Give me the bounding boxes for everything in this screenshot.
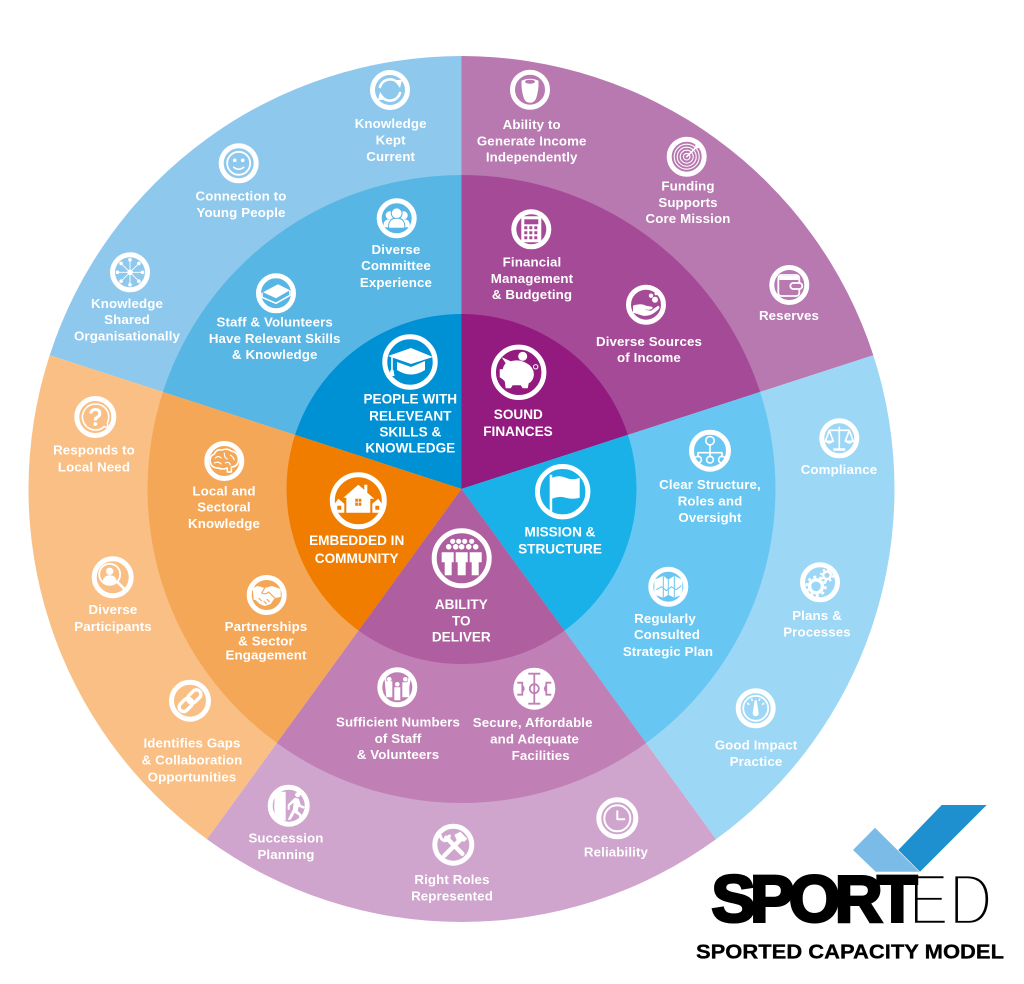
logo: Sported wordmark and check mark xyxy=(712,805,992,940)
band: inner finance core xyxy=(462,314,628,489)
icon: graduation cap xyxy=(385,337,435,387)
caption: Sported capacity model: SPORTED CAPACITY MODEL xyxy=(696,942,1004,964)
icon: committee group xyxy=(379,201,414,236)
heading: embedded in community: EMBEDDED IN xyxy=(309,533,404,548)
label: clear structure roles and oversight: Roles and xyxy=(678,494,742,509)
label: connection to young people: Connection to xyxy=(196,189,286,204)
heading: ability to deliver: DELIVER xyxy=(432,630,491,645)
heading: ability to deliver: ABILITY xyxy=(435,597,488,612)
icon: wallet xyxy=(772,268,807,302)
label: good impact practice: Good Impact xyxy=(715,737,798,752)
label: funding supports core mission: Core Mission xyxy=(646,211,730,226)
band: outer people ring xyxy=(50,56,461,489)
label: succession planning: Planning xyxy=(257,847,315,862)
label: local and sectoral knowledge: Knowledge xyxy=(188,516,260,531)
icon: smiling face xyxy=(221,146,256,181)
icon: handshake xyxy=(249,578,284,612)
label: local and sectoral knowledge: Local and xyxy=(192,484,256,499)
icon: circular arrows xyxy=(372,72,408,108)
heading: people with relevant skills: PEOPLE WITH xyxy=(363,391,457,406)
band: middle community ring xyxy=(148,392,462,743)
icon: person leaving door xyxy=(270,787,307,824)
icon: hand with coins xyxy=(628,287,664,322)
label: knowledge kept current: Kept xyxy=(376,132,406,148)
panel: sound finances xyxy=(462,56,873,489)
icon: question bubble xyxy=(77,398,114,436)
icon: crossed hammer and wrench xyxy=(435,826,472,863)
icon: brain xyxy=(207,444,242,478)
label: reliability: Reliability xyxy=(584,845,649,860)
label: sufficient numbers of staff and volunteers: Sufficient Numbers xyxy=(336,715,460,730)
label: diverse committee experience: Experience xyxy=(360,275,432,290)
heading: people with relevant skills: KNOWLEDGE xyxy=(365,441,455,456)
band: inner community core xyxy=(287,435,462,631)
panel: embedded in community xyxy=(29,355,461,839)
label: diverse committee experience: Diverse xyxy=(372,242,420,257)
label: partnerships and sector engagement: Partnerships xyxy=(225,619,307,634)
label: knowledge shared organisationally: Knowledge xyxy=(91,296,163,311)
icon: staff raising hands xyxy=(380,670,415,705)
label: regularly consulted strategic plan: Regularly xyxy=(634,611,696,626)
band: middle mission ring xyxy=(462,392,775,743)
panel: ability to deliver xyxy=(207,489,716,922)
panel: mission and structure xyxy=(462,355,894,839)
label: secure affordable adequate facilities: Facilities xyxy=(512,748,570,763)
label: diverse sources of income: Diverse Sources xyxy=(596,334,702,349)
icon: tumbler xyxy=(512,71,548,107)
heading: embedded in community: COMMUNITY xyxy=(315,551,399,566)
icon: calculator xyxy=(514,212,549,247)
label: reserves: Reserves xyxy=(759,308,819,323)
label: identifies gaps and collaboration opportunities: & Collaboration xyxy=(142,752,242,768)
heading: people with relevant skills: RELEVEANT xyxy=(369,408,452,423)
icon: houses xyxy=(332,475,384,527)
label: secure affordable adequate facilities: Secure, Affordable xyxy=(473,715,593,730)
label: diverse committee experience: Committee xyxy=(361,258,431,273)
label: regularly consulted strategic plan: Strategic Plan xyxy=(623,644,713,659)
icon: flag xyxy=(538,466,588,517)
label: ability to generate income: Generate Income xyxy=(477,134,587,148)
band: inner mission core xyxy=(462,435,636,631)
icon: gears xyxy=(802,565,838,600)
heading: ability to deliver: TO xyxy=(452,614,471,629)
label: funding supports core mission: Funding xyxy=(661,179,715,194)
label: partnerships and sector engagement: & Sector xyxy=(238,634,294,649)
band: outer mission ring xyxy=(462,355,894,839)
band: outer finance ring xyxy=(462,56,873,489)
label: diverse sources of income: of Income xyxy=(617,350,681,365)
label: plans and processes: Plans & xyxy=(792,608,842,623)
label: knowledge shared organisationally: Shared xyxy=(104,312,150,327)
label: good impact practice: Practice xyxy=(730,754,782,769)
label: clear structure roles and oversight: Oversight xyxy=(678,510,742,525)
label: funding supports core mission: Supports xyxy=(658,195,718,210)
icon: organisation chart xyxy=(692,432,728,469)
icon: folded map xyxy=(651,569,686,604)
label: ability to generate income: Independently xyxy=(486,150,578,165)
label: plans and processes: Processes xyxy=(783,625,851,640)
label: regularly consulted strategic plan: Consulted xyxy=(634,627,700,642)
label: financial management and budgeting: & Budgeting xyxy=(492,287,572,302)
label: local and sectoral knowledge: Sectoral xyxy=(197,500,251,515)
label: staff and volunteers skills: Have Relevant Skills xyxy=(209,331,341,346)
icon: check mark xyxy=(853,805,987,872)
band: middle finance ring xyxy=(462,175,760,489)
wordmark: thin ED: ED xyxy=(908,860,992,940)
icon: chain link xyxy=(172,682,208,719)
heading: people with relevant skills: SKILLS & xyxy=(379,425,441,440)
label: identifies gaps and collaboration opportunities: Opportunities xyxy=(148,770,236,784)
label: diverse participants: Participants xyxy=(74,619,152,634)
band: outer community ring xyxy=(29,355,461,839)
icon: person under magnifier xyxy=(94,559,131,596)
band: outer delivery ring xyxy=(207,489,716,922)
label: succession planning: Succession xyxy=(248,831,324,846)
label: knowledge kept current: Current xyxy=(366,149,416,164)
label: financial management and budgeting: Management xyxy=(491,271,574,286)
icon: knowledge network xyxy=(112,255,148,290)
label: knowledge kept current: Knowledge xyxy=(355,116,427,131)
label: responds to local need: Local Need xyxy=(58,460,130,475)
wordmark: heavy SPORT: SPORT xyxy=(712,862,918,936)
label: partnerships and sector engagement: Engagement xyxy=(226,648,307,663)
label: right roles represented: Right Roles xyxy=(414,872,490,887)
band: middle people ring xyxy=(163,175,462,489)
icon: piggy bank xyxy=(494,347,544,398)
label: identifies gaps and collaboration opportunities: Identifies Gaps xyxy=(143,736,241,751)
label: sufficient numbers of staff and volunteers: of Staff xyxy=(375,731,422,746)
label: knowledge shared organisationally: Organisationally xyxy=(74,328,181,344)
label: staff and volunteers skills: Staff & Volunteers xyxy=(216,315,333,330)
icon: crowd of people xyxy=(434,531,489,586)
heading: sound finances: SOUND xyxy=(494,407,543,422)
label: sufficient numbers of staff and volunteers: & Volunteers xyxy=(357,747,439,762)
heading: mission and structure: STRUCTURE xyxy=(518,542,602,557)
label: secure affordable adequate facilities: and Adequate xyxy=(490,732,579,746)
icon: target xyxy=(669,139,704,174)
label: compliance: Compliance xyxy=(801,462,877,477)
band: middle delivery ring xyxy=(277,489,646,803)
icon: book xyxy=(258,276,294,311)
icon: sports pitch xyxy=(513,668,555,710)
label: responds to local need: Responds to xyxy=(53,443,135,458)
label: financial management and budgeting: Financial xyxy=(503,255,561,270)
label: ability to generate income: Ability to xyxy=(503,117,561,132)
heading: sound finances: FINANCES xyxy=(483,424,553,439)
heading: mission and structure: MISSION & xyxy=(524,524,596,539)
label: right roles represented: Represented xyxy=(411,889,493,904)
icon: clock xyxy=(599,800,636,837)
panel: people with relevant skills and knowledge xyxy=(50,56,461,489)
label: staff and volunteers skills: & Knowledge xyxy=(232,347,317,362)
band: inner delivery core xyxy=(359,489,564,664)
label: connection to young people: Young People xyxy=(196,205,286,220)
icon: gauge xyxy=(738,691,773,726)
icon: balance scales xyxy=(822,421,857,456)
label: diverse participants: Diverse xyxy=(89,602,137,617)
band: inner people core xyxy=(295,314,462,489)
label: clear structure roles and oversight: Clear Structure, xyxy=(659,477,761,492)
